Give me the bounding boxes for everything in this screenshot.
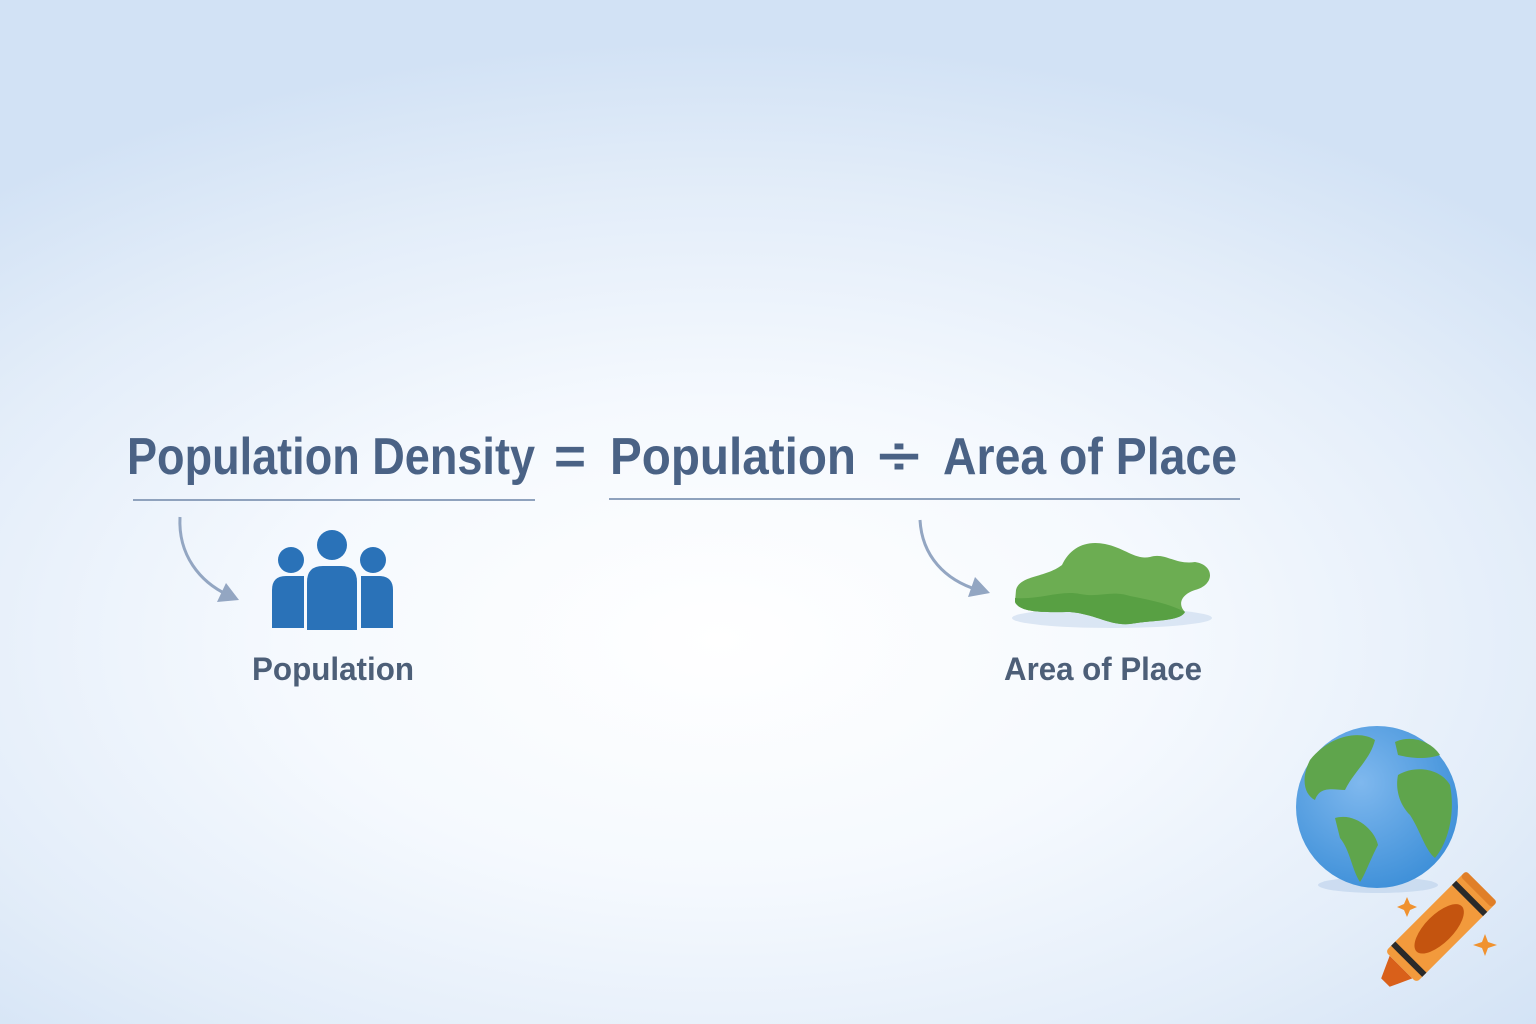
arrow: to area [920,520,990,597]
formula heading: ÷ [878,428,920,486]
formula heading: Area of Place [943,428,1237,486]
formula heading: = [554,428,586,486]
formula heading [127,428,1237,486]
underline right [609,498,1240,500]
formula heading: Population Density [127,428,535,486]
arrow: to population [180,517,239,602]
formula heading: Population [610,428,856,486]
icon: land area [1012,543,1212,628]
icon: globe [1296,726,1458,893]
sparkles [1397,897,1497,956]
underline left [133,499,535,501]
icon: people [272,530,393,630]
label: population: Population [252,651,414,687]
icon: crayon [1370,871,1497,998]
label: area of place: Area of Place [1004,651,1202,687]
